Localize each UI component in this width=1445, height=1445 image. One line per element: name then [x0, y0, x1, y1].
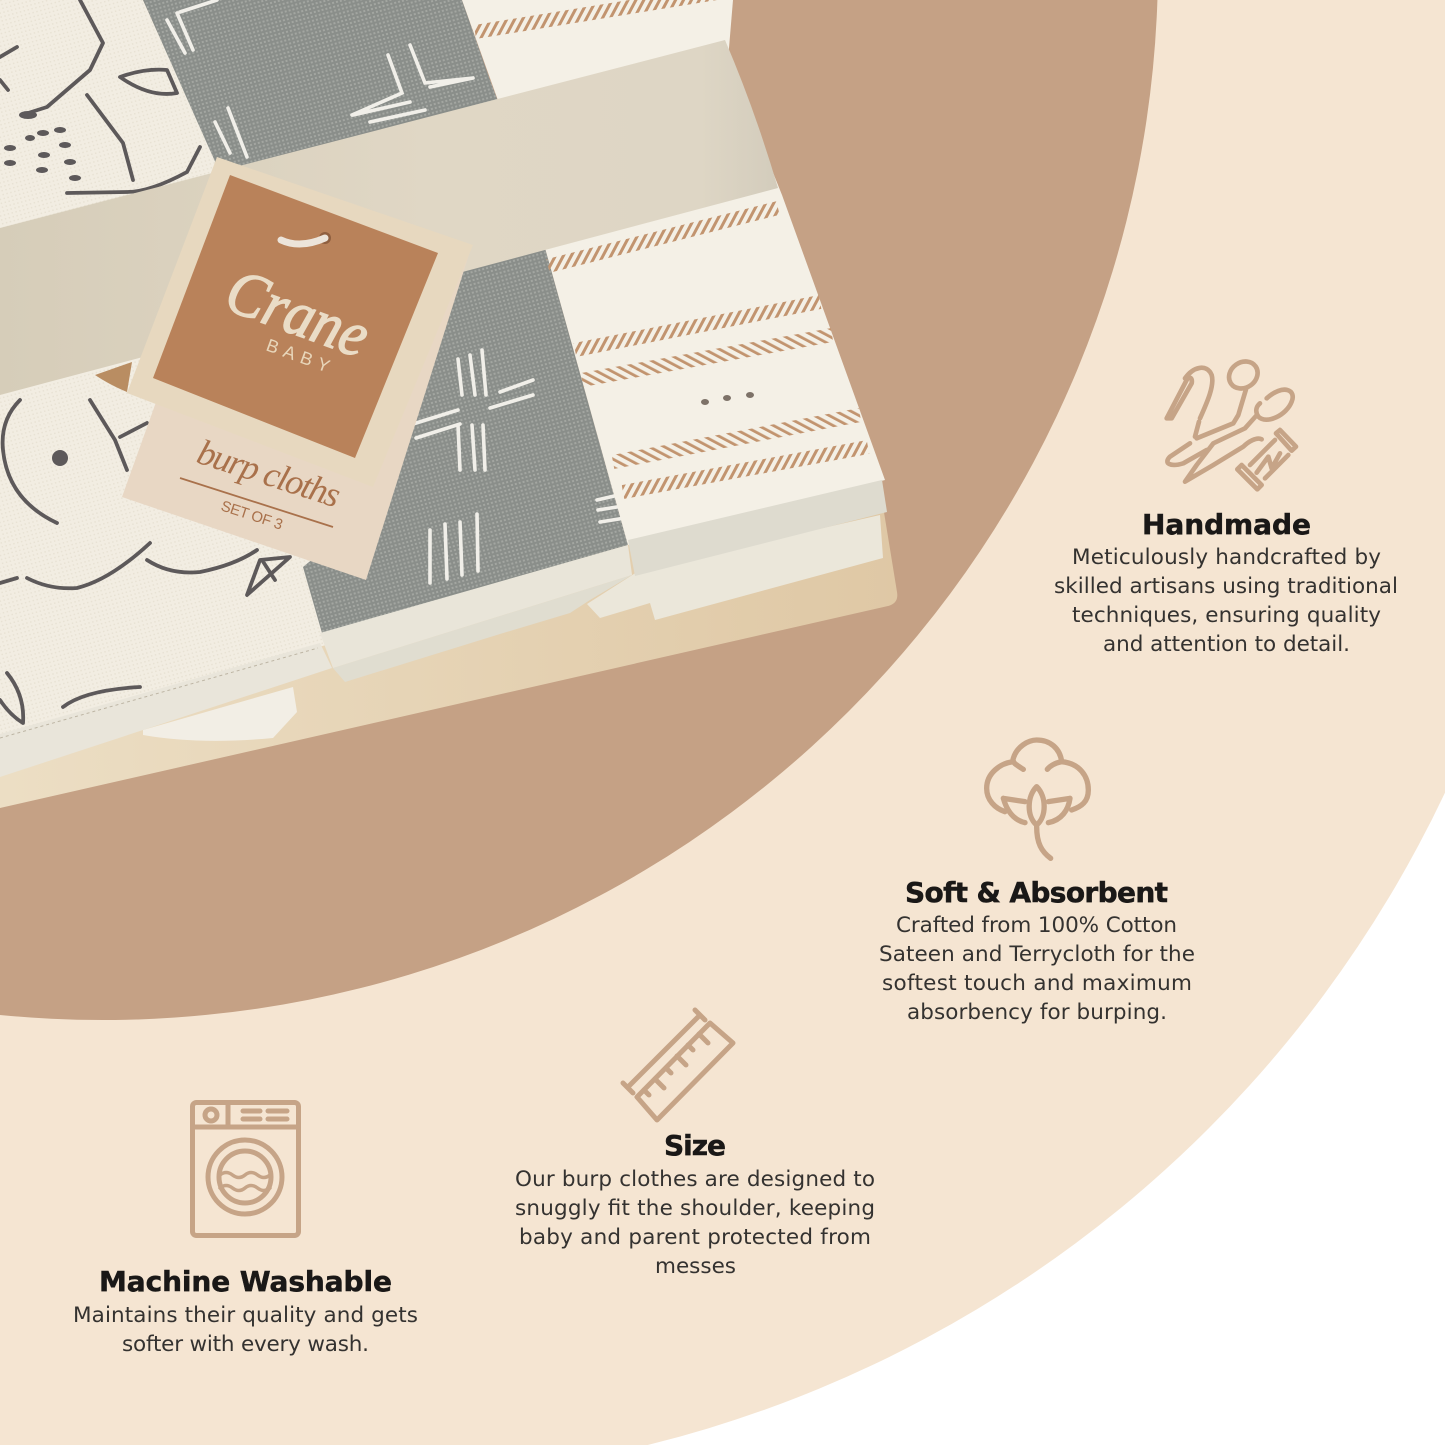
brand script: Crane [217, 254, 379, 371]
icon: ruler [623, 1010, 733, 1120]
tag rule [180, 478, 333, 527]
left cloth with bird print [0, 0, 332, 777]
tan cloth peek under band [95, 362, 132, 392]
grey middle cloth with white crosses [143, 0, 632, 668]
icon: washing machine [192, 1102, 298, 1236]
description: messes [655, 1254, 736, 1279]
heading: Size [664, 1129, 726, 1162]
description: Maintains their quality and gets [73, 1303, 418, 1328]
heading: Soft & Absorbent [905, 876, 1168, 909]
description: Meticulously handcrafted by [1072, 545, 1381, 570]
tag string [281, 232, 331, 244]
description: skilled artisans using traditional [1054, 574, 1398, 599]
description: softest touch and maximum [882, 971, 1192, 996]
description [879, 913, 1195, 1025]
description: Crafted from 100% Cotton [896, 913, 1177, 938]
brand sub-line: BABY [264, 335, 332, 376]
description: softer with every wash. [122, 1332, 369, 1357]
description: Sateen and Terrycloth for the [879, 942, 1195, 967]
fabric belly band [0, 40, 778, 395]
right cream cloth with tan stripes [462, 0, 887, 576]
description: Our burp clothes are designed to [515, 1167, 875, 1192]
upper brand tag [127, 157, 473, 487]
description: techniques, ensuring quality [1072, 603, 1381, 628]
feature: Soft & Absorbent [879, 740, 1195, 1025]
lower hang tag [122, 245, 472, 580]
description: absorbency for burping. [907, 1000, 1167, 1025]
heading: Machine Washable [99, 1265, 392, 1298]
description: snuggly fit the shoulder, keeping [515, 1196, 875, 1221]
handwritten product name: burp cloths [193, 432, 346, 515]
description: baby and parent protected from [519, 1225, 871, 1250]
background: bottom-left cream fill [0, 1300, 300, 1445]
description: and attention to detail. [1103, 632, 1350, 657]
icon: cotton boll [987, 740, 1088, 858]
heading: Handmade [1142, 508, 1311, 541]
description [73, 1303, 418, 1357]
feature: Machine Washable [73, 1102, 418, 1357]
underlayers of folded cloth [143, 515, 883, 741]
description [1054, 545, 1398, 657]
background: brown circle [0, 0, 1158, 1020]
set of 3: SET OF 3 [219, 498, 285, 534]
feature: Handmade [1054, 356, 1398, 657]
tray under the cloths [0, 500, 897, 808]
product photo: folded burp cloths with tag [0, 0, 897, 808]
icon: needle, scissors and thread [1167, 356, 1296, 489]
description [515, 1167, 875, 1279]
feature: Size [515, 1010, 875, 1279]
